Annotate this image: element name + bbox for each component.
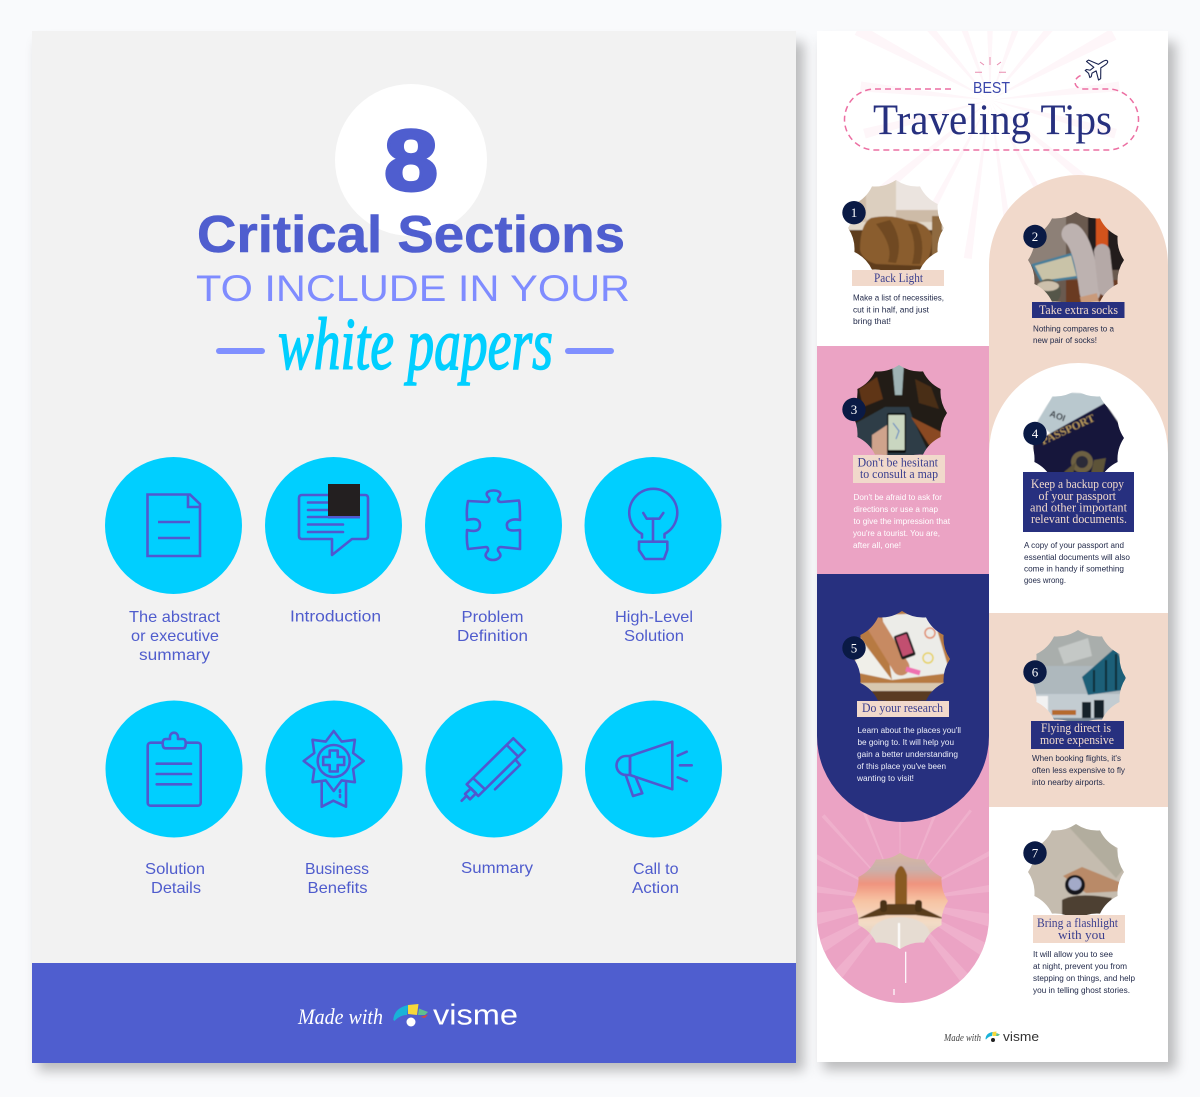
item: business benefits: Business <box>305 861 369 878</box>
tip 2 <box>1023 210 1128 345</box>
item: business benefits: Benefits <box>308 880 368 897</box>
photo: passport <box>1032 392 1124 472</box>
photo: phone map <box>855 365 947 455</box>
number 6: 6 <box>1032 664 1039 680</box>
footer: visme wordmark: visme <box>433 1000 518 1032</box>
item: problem definition: Problem <box>462 609 524 626</box>
number 5: 5 <box>851 640 857 656</box>
icon: sparkle above heading <box>975 57 1006 72</box>
right title dash <box>565 348 614 354</box>
text: research: of this place you've been <box>857 761 946 771</box>
script title: white papers <box>278 304 553 386</box>
number 1 <box>842 201 866 224</box>
panel: peach arch <box>989 175 1168 452</box>
label: pack light <box>852 270 944 286</box>
label: passport: and other important <box>1030 500 1128 514</box>
icon: marker <box>462 738 525 801</box>
photo: socks <box>1028 212 1124 302</box>
icon: puzzle piece <box>467 490 520 560</box>
label: passport <box>1023 472 1134 532</box>
number 7: 7 <box>1032 846 1039 860</box>
label: flying direct <box>1031 721 1124 749</box>
item: abstract: or executive <box>131 628 219 645</box>
label: flashlight: Bring a flashlight <box>1037 916 1118 930</box>
item: summary: Summary <box>461 860 533 877</box>
photo: flashlight <box>1026 822 1126 922</box>
text: consult map: Don't be afraid to ask for <box>854 492 942 502</box>
text: flashlight: you in telling ghost stories. <box>1033 985 1130 995</box>
item: high-level solution: High-Level <box>615 609 693 626</box>
label: research: Do your research <box>862 701 944 715</box>
text: pack light: cut it in half, and just <box>853 304 930 314</box>
footer: made with visme: visme <box>1003 1029 1039 1044</box>
text: flying direct: into nearby airports. <box>1032 777 1105 787</box>
text: research: wanting to visit! <box>856 773 914 783</box>
item: introduction <box>265 457 402 626</box>
icon: small visme logo <box>986 1032 1000 1042</box>
text: research: be going to. It will help you <box>858 737 954 747</box>
item: abstract <box>105 457 242 664</box>
text: consult map: directions or use a map <box>854 504 938 514</box>
tip 5 <box>842 609 961 783</box>
text: flashlight: stepping on things, and help <box>1033 973 1135 983</box>
icon: megaphone <box>616 742 692 796</box>
panel: peach block <box>989 613 1168 807</box>
number 4 <box>1023 422 1047 445</box>
title: number 8: 8 <box>384 113 438 209</box>
item: call to action: Call to <box>633 861 679 878</box>
item: solution details: Details <box>151 880 201 897</box>
photo: passport: PASSPORT <box>1039 412 1097 448</box>
item: problem definition: Definition <box>457 628 528 645</box>
photo: desk research <box>854 611 950 701</box>
icon: document <box>148 494 200 556</box>
item: call to action: Action <box>632 880 679 897</box>
photo: plane takeoff <box>850 851 950 953</box>
text: passport: goes wrong. <box>1024 575 1066 585</box>
text: consult map: you're a tourist. You are, <box>853 528 940 538</box>
label: passport: Keep a backup copy <box>1031 477 1125 491</box>
panel: navy arch <box>817 574 989 822</box>
number 2: 2 <box>1032 229 1038 244</box>
text: flying direct: When booking flights, it's <box>1032 753 1121 763</box>
item: high-level solution: Solution <box>624 628 684 645</box>
text: consult map: to give the impression that <box>854 516 951 526</box>
title: critical sections: Critical Sections <box>197 206 625 264</box>
item: problem definition <box>425 457 562 645</box>
text: consult map: after all, one! <box>853 540 901 550</box>
heading: best: BEST <box>973 80 1010 97</box>
item: high-level solution <box>584 457 722 645</box>
text: flashlight: at night, prevent you from <box>1033 961 1127 971</box>
label: socks: Take extra socks <box>1039 303 1118 317</box>
label: passport: of your passport <box>1038 489 1116 503</box>
tip 6 <box>1023 628 1128 787</box>
text: passport: essential documents will also <box>1024 552 1130 562</box>
heading: traveling tips: Traveling Tips <box>873 97 1112 144</box>
text: passport <box>1024 540 1130 585</box>
photo: passport: AOI <box>1048 408 1067 423</box>
pink sunburst <box>817 810 989 981</box>
photo: travel bag <box>848 180 944 270</box>
item: introduction: Introduction <box>290 608 381 626</box>
tip 3 <box>842 363 951 550</box>
label: flashlight: with you <box>1058 928 1106 942</box>
left title dash <box>216 348 265 354</box>
number 7 <box>1023 841 1047 865</box>
text: socks: Nothing compares to a <box>1033 324 1114 334</box>
tip 7 <box>1023 822 1135 995</box>
label: flying direct: more expensive <box>1040 733 1114 747</box>
text: research: gain a better understanding <box>857 749 958 759</box>
footer: made with visme <box>943 1029 1039 1044</box>
tip 1 <box>842 178 946 326</box>
label: consult map <box>853 455 945 483</box>
label: flashlight <box>1033 915 1125 943</box>
item: solution details <box>106 700 242 897</box>
runway markings <box>894 952 906 995</box>
panel: white paper sections <box>32 31 796 1063</box>
label: pack light: Pack Light <box>874 271 923 285</box>
number 5 <box>842 636 866 660</box>
icon: badge <box>304 731 364 807</box>
text: pack light <box>853 292 944 326</box>
panel: pink column <box>817 346 989 1003</box>
number 3 <box>842 398 866 421</box>
number 6 <box>1023 660 1047 684</box>
header sunburst <box>855 31 1120 258</box>
text: flying direct <box>1032 753 1126 787</box>
footer band <box>32 963 796 1063</box>
number 1: 1 <box>851 205 857 220</box>
label: consult map: Don't be hesitant <box>858 456 938 470</box>
item: solution details: Solution <box>145 861 205 878</box>
footer: made with visme: Made with <box>943 1033 981 1044</box>
item: business benefits <box>266 700 402 897</box>
text: consult map <box>853 492 951 550</box>
item: summary <box>426 700 562 877</box>
icon: clipboard <box>148 733 201 806</box>
text: passport: A copy of your passport and <box>1024 540 1124 550</box>
text: socks: new pair of socks! <box>1033 335 1097 345</box>
text: research: Learn about the places you'll <box>858 725 961 735</box>
text: flashlight: It will allow you to see <box>1033 949 1113 959</box>
text: research <box>856 725 961 783</box>
label: passport: relevant documents. <box>1031 512 1127 526</box>
text: pack light: bring that! <box>853 316 891 326</box>
item: abstract: The abstract <box>129 609 221 626</box>
icon: visme logo <box>393 1004 428 1026</box>
item: call to action <box>585 700 722 897</box>
text: passport: come in handy if something <box>1024 564 1124 574</box>
text: socks <box>1034 326 1114 344</box>
number 3: 3 <box>851 402 857 417</box>
label: flying direct: Flying direct is <box>1041 721 1111 735</box>
icon: speech bubble <box>299 495 368 555</box>
icon: airplane <box>1084 60 1108 81</box>
footer: made with: Made with <box>297 1004 383 1029</box>
white circle behind number <box>335 84 487 236</box>
panel: white arch <box>989 363 1168 613</box>
photo: airport <box>1033 630 1126 721</box>
label: consult map: to consult a map <box>860 467 938 481</box>
tip 4 <box>1023 388 1134 585</box>
text: flashlight <box>1033 949 1135 995</box>
icon: light bulb <box>629 489 677 559</box>
panel: traveling tips <box>817 32 1168 1062</box>
text: pack light: Make a list of necessities, <box>853 292 944 302</box>
text: flying direct: often less expensive to fly <box>1032 765 1126 775</box>
item: abstract: summary <box>139 647 210 664</box>
number 4: 4 <box>1032 426 1039 441</box>
dashed flight path <box>844 75 1138 150</box>
subtitle: TO INCLUDE IN YOUR <box>196 267 630 309</box>
